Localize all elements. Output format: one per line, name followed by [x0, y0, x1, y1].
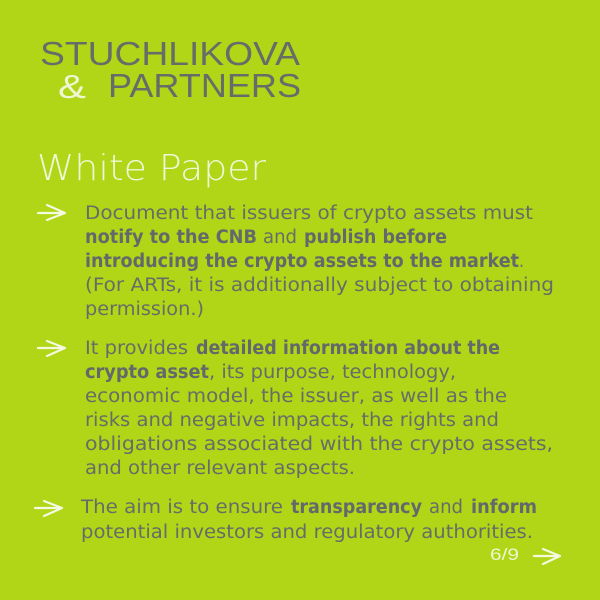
logo: & [58, 68, 86, 105]
text block 2: crypto asset [85, 362, 209, 383]
text block 1: and [263, 227, 297, 248]
logo [40, 35, 301, 105]
text block 2: and other relevant aspects. [85, 458, 355, 479]
text block 1: publish before [304, 227, 447, 248]
text block 1: permission.) [85, 299, 204, 320]
arrow 3 [35, 501, 62, 516]
text block 2 [85, 338, 553, 479]
text block 2: economic model, the issuer, as well as the [85, 386, 507, 407]
text block 1: introducing the crypto assets to the market [85, 251, 519, 272]
text block 1: notify to the CNB [85, 227, 257, 248]
text block 1: (For ARTs, it is additionally subject to obtaining [85, 275, 554, 296]
heading: White Paper: White Paper [37, 148, 266, 189]
logo: PARTNERS [108, 67, 301, 104]
text block 3: The aim is to ensure [80, 497, 283, 518]
arrow 1 [38, 205, 65, 220]
logo: STUCHLIKOVA [40, 35, 300, 72]
page number: 6/9 [490, 545, 519, 564]
text block 1 [85, 203, 554, 320]
text block 3: and [429, 497, 463, 518]
text block 1: Document that issuers of crypto assets must [85, 203, 533, 224]
text block 3: transparency [291, 497, 422, 518]
text block 3: inform [471, 497, 537, 518]
text block 2: , its purpose, technology, [209, 362, 456, 383]
text block 2: detailed information about the [196, 338, 500, 359]
arrow 2 [38, 341, 65, 356]
text block 3 [80, 497, 537, 543]
text block 2: obligations associated with the crypto assets, [85, 434, 553, 455]
text block 2: risks and negative impacts, the rights and [85, 410, 499, 431]
text block 1: . [519, 251, 524, 272]
arrow: next page [534, 549, 560, 564]
text block 3: potential investors and regulatory authorities. [81, 522, 533, 543]
text block 2: It provides [85, 338, 188, 359]
